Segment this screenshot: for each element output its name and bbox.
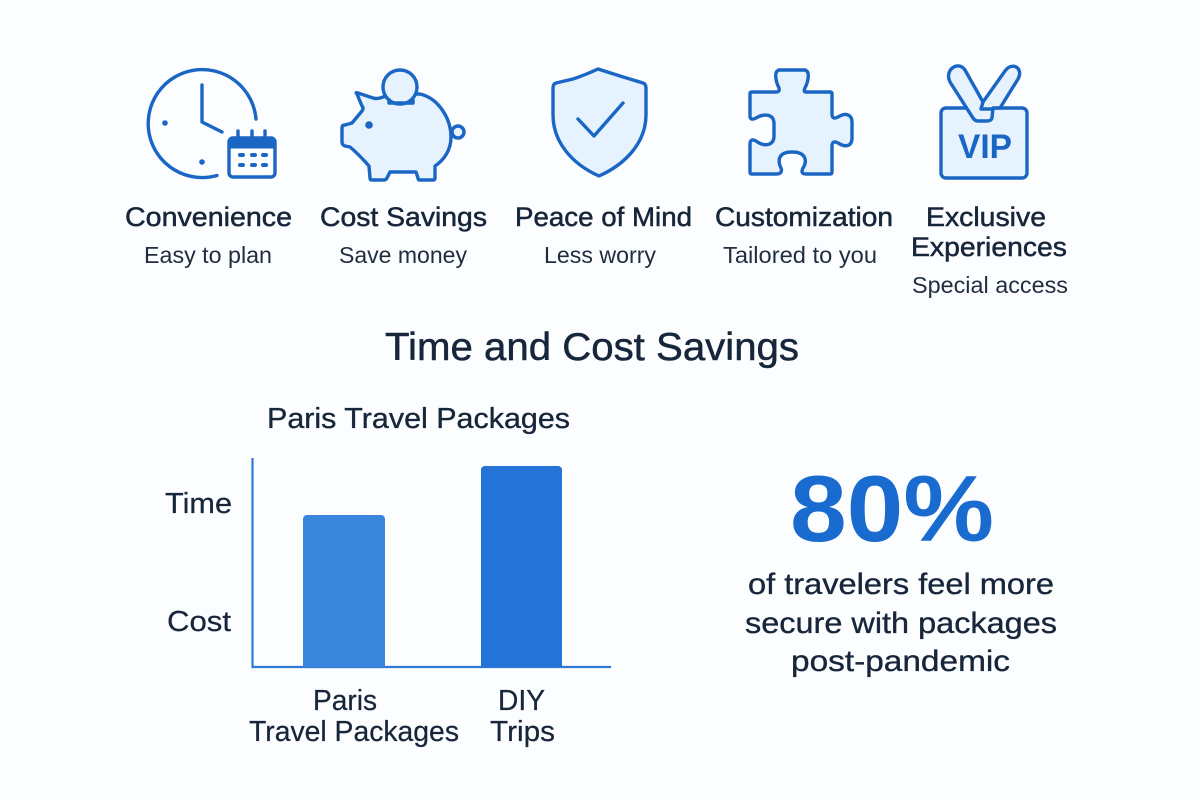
- bar: paris travel packages: [303, 515, 385, 667]
- x axis label: DIY trips: Trips: [490, 716, 555, 748]
- text: less worry: Less worry: [544, 242, 656, 268]
- x axis label: paris travel packages: Travel Packages: [249, 716, 459, 748]
- text: easy to plan: Easy to plan: [144, 242, 272, 268]
- callout text: of travelers feel more: [748, 568, 1054, 601]
- heading: time and cost savings: Time and Cost Savings: [385, 326, 799, 369]
- callout text: post-pandemic: [791, 645, 1010, 678]
- benefit: customization: [715, 70, 893, 268]
- benefit: cost savings: [320, 70, 487, 268]
- y axis labels: [165, 488, 232, 638]
- axes: [252, 458, 611, 667]
- icon: piggy bank with coin: [342, 70, 464, 180]
- big number: 80%: [790, 456, 994, 561]
- icon: clock with calendar: [148, 70, 275, 178]
- benefit: convenience: [125, 70, 292, 268]
- heading: exclusive experiences: Experiences: [911, 232, 1067, 262]
- chart title: Paris Travel Packages: [267, 403, 570, 435]
- y axis labels: Cost: [167, 606, 231, 638]
- icon: shield with check: [553, 69, 646, 176]
- bar: DIY trips: [481, 466, 562, 667]
- benefit: peace of mind: [515, 69, 692, 268]
- heading: peace of mind: Peace of Mind: [515, 202, 692, 232]
- callout text: secure with packages: [745, 607, 1057, 640]
- heading: convenience: Convenience: [125, 202, 292, 232]
- panel: benefits row: [125, 66, 1068, 298]
- panel: bar chart: [165, 403, 611, 748]
- icon: puzzle piece: [750, 70, 852, 174]
- callout: 80 percent statistic: [745, 456, 1057, 678]
- icon: VIP badge: VIP: [958, 128, 1012, 166]
- x axis label: paris travel packages: Paris: [313, 685, 377, 717]
- heading: cost savings: Cost Savings: [320, 202, 487, 232]
- heading: customization: Customization: [715, 202, 893, 232]
- text: special access: Special access: [912, 272, 1068, 298]
- x axis label: DIY trips: DIY: [498, 685, 545, 717]
- icon: VIP badge: [941, 66, 1027, 178]
- text: tailored to you: Tailored to you: [723, 242, 877, 268]
- benefit: exclusive experiences: [911, 66, 1068, 298]
- text: save money: Save money: [339, 242, 467, 268]
- heading: exclusive experiences: Exclusive: [926, 202, 1046, 232]
- y axis labels: Time: [165, 488, 232, 520]
